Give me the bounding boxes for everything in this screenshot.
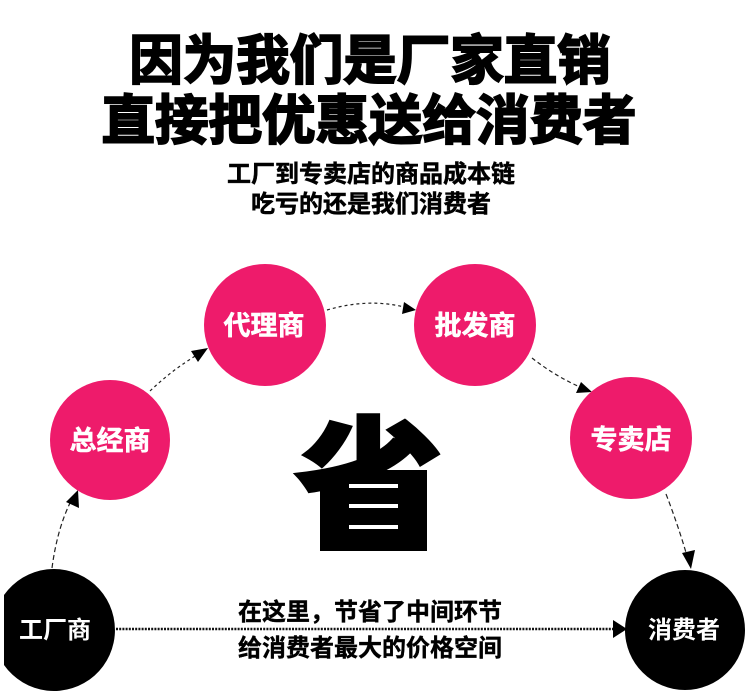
subtitle: 吃亏的还是我们消费者 — [251, 191, 491, 218]
arrow: factory to consumer dotted line — [116, 620, 627, 638]
node: consumer: 消费者 — [648, 617, 720, 644]
node: wholesaler: 批发商 — [434, 311, 516, 341]
arrow: general distributor to agent — [150, 348, 208, 391]
node: factory: 工厂商 — [19, 617, 91, 644]
node: agent: 代理商 — [224, 311, 304, 341]
node: agent — [204, 264, 326, 386]
big character: 省 — [296, 409, 442, 565]
title — [102, 32, 636, 151]
savings text: 在这里，节省了中间环节 — [238, 599, 502, 626]
node: wholesaler — [414, 264, 536, 386]
title: 直接把优惠送给消费者 — [102, 92, 636, 151]
savings text — [238, 599, 502, 662]
node: store: 专卖店 — [590, 425, 672, 455]
node: factory — [4, 569, 115, 691]
arrow: store to consumer — [666, 494, 695, 569]
arrow: agent to wholesaler — [327, 302, 416, 314]
node: general distributor — [50, 380, 170, 500]
subtitle — [227, 161, 515, 218]
savings text: 给消费者最大的价格空间 — [238, 635, 502, 662]
node: consumer — [625, 570, 745, 690]
subtitle: 工厂到专卖店的商品成本链 — [227, 161, 515, 188]
title: 因为我们是厂家直销 — [129, 32, 611, 91]
node: store — [570, 377, 692, 499]
arrow: wholesaler to store — [532, 358, 592, 393]
node: general distributor: 总经商 — [70, 426, 150, 456]
arrow: factory to general distributor — [52, 490, 79, 568]
